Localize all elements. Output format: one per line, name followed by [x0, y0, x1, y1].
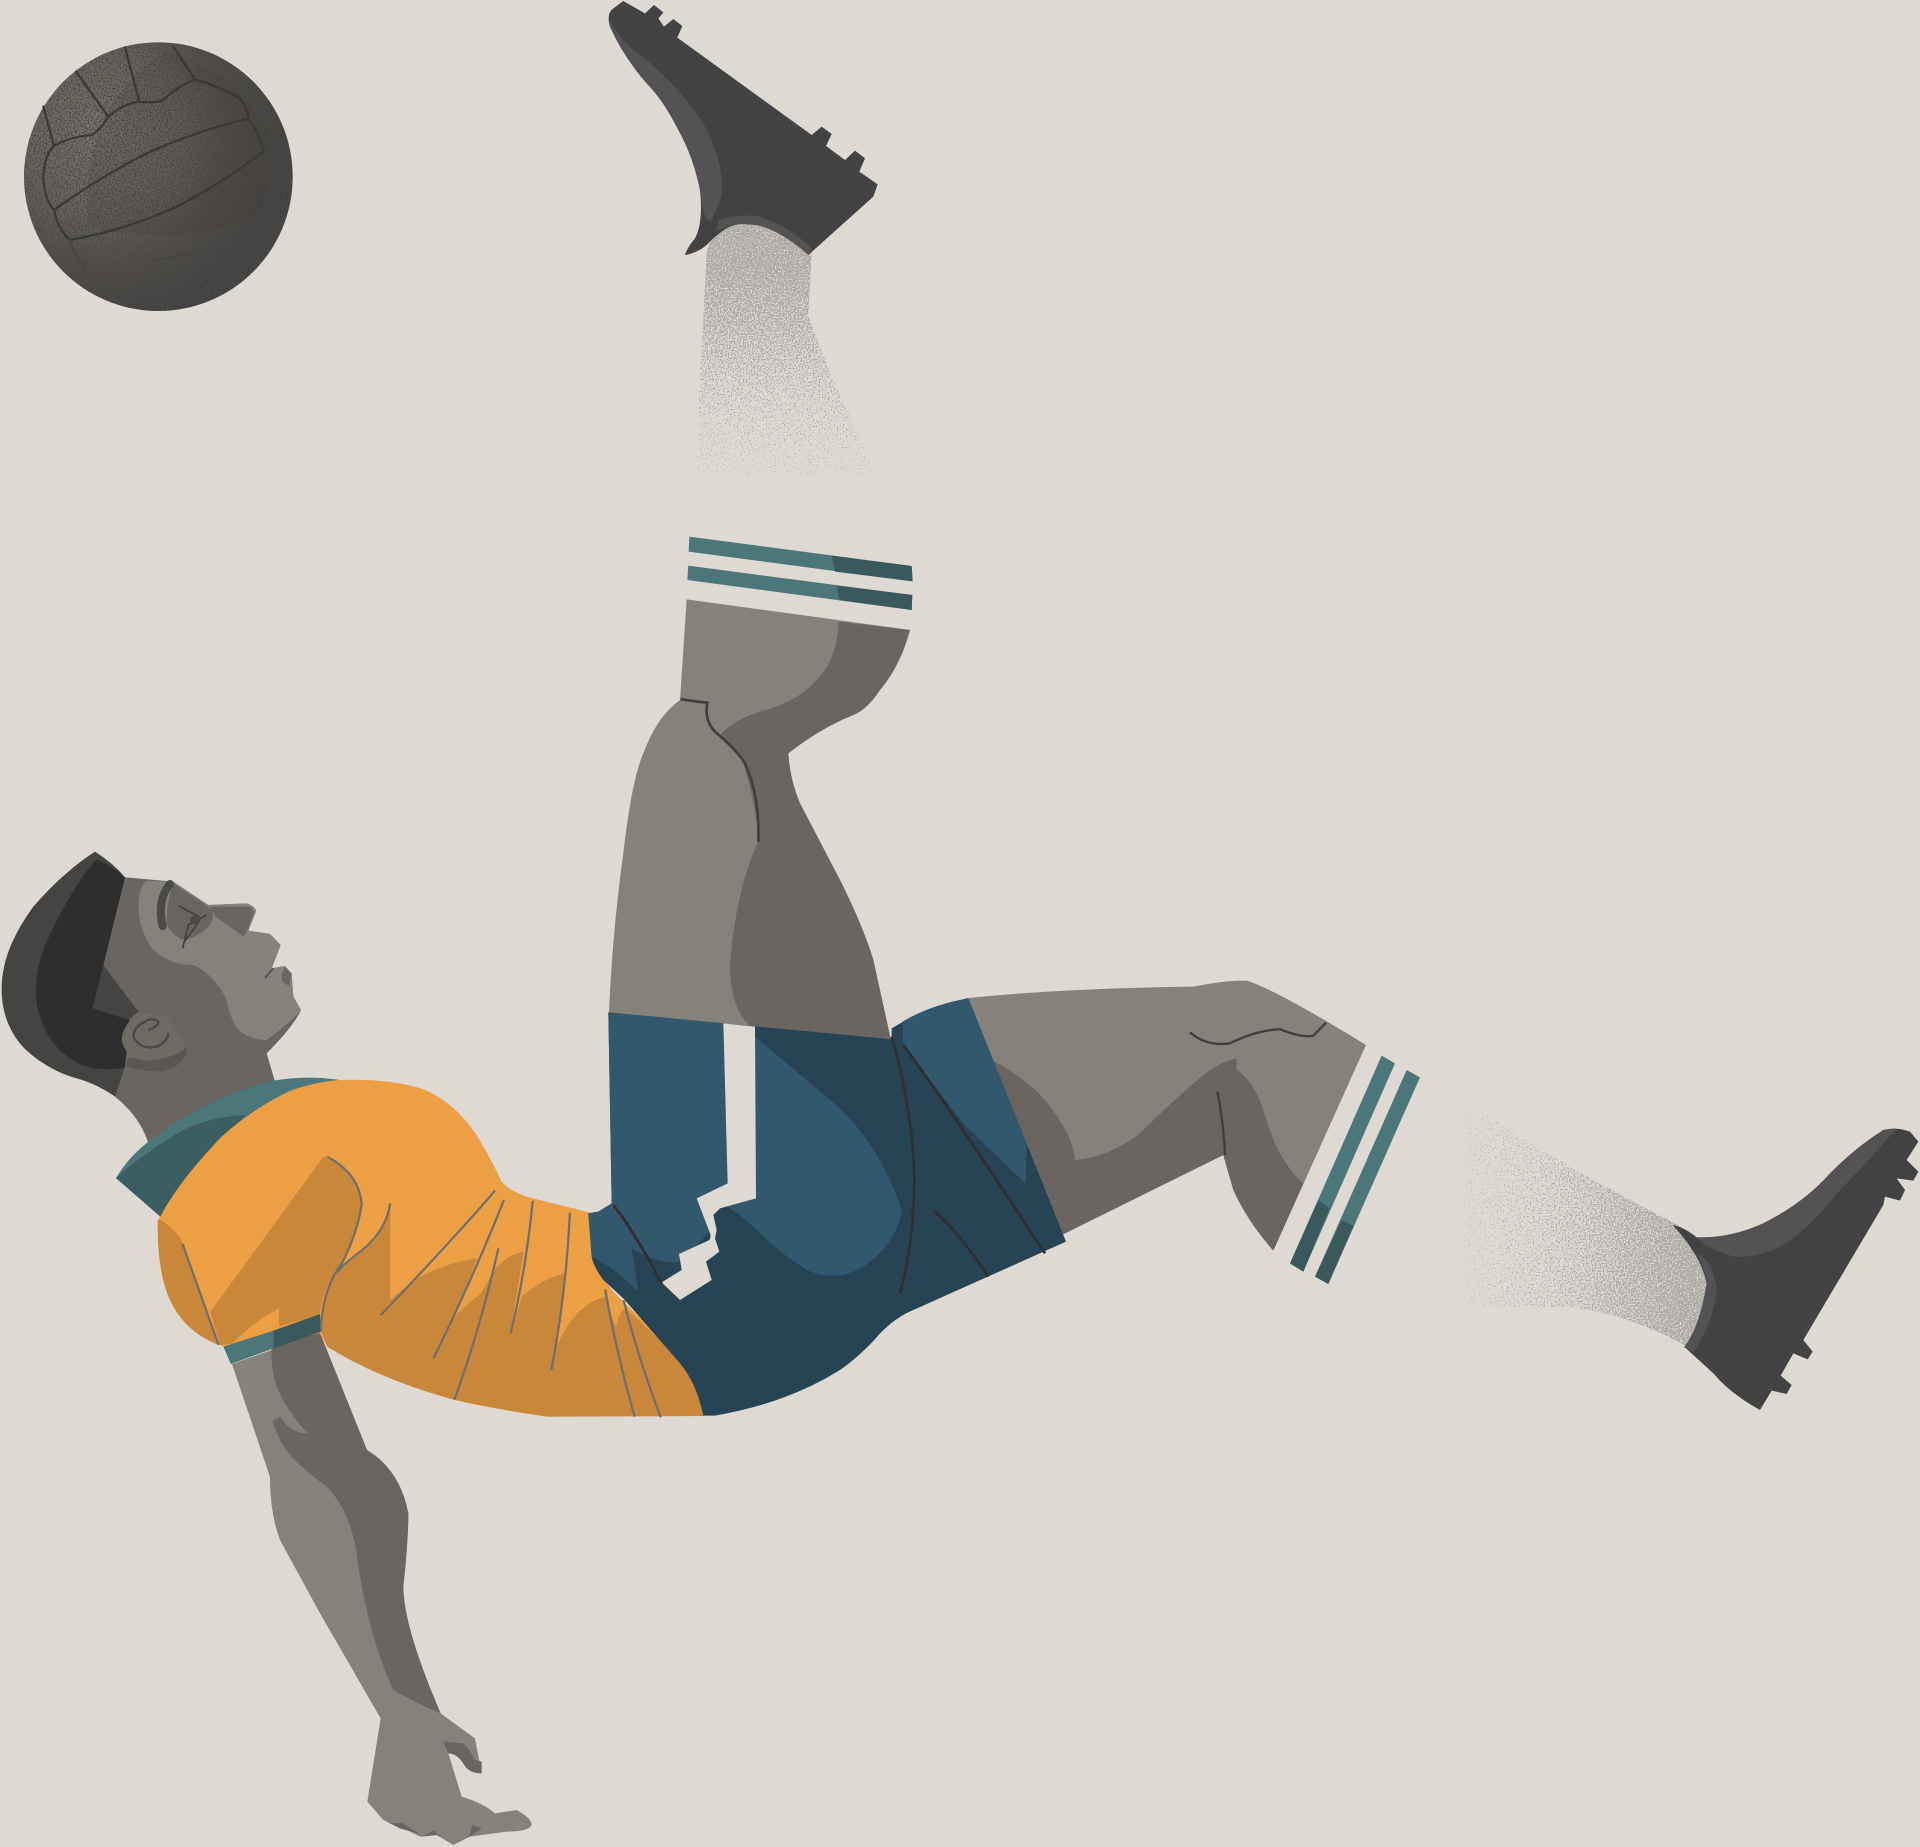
ear	[122, 1012, 187, 1072]
face highlight	[138, 881, 301, 1040]
shirt wrinkles	[183, 1157, 661, 1417]
shorts highlights	[588, 998, 1027, 1292]
face details	[161, 883, 291, 985]
shorts	[588, 998, 1066, 1416]
upper boot	[609, 1, 878, 255]
football	[24, 42, 293, 311]
shorts seams	[613, 1037, 1045, 1293]
hair	[2, 852, 138, 1097]
white side stripe	[662, 1023, 756, 1300]
shorts base	[588, 998, 1066, 1416]
skin shadow	[97, 877, 301, 1143]
shirt	[116, 1078, 704, 1417]
upper leg: sock bands and shin	[608, 537, 913, 1043]
arm and hand	[232, 1333, 532, 1845]
lower leg: thigh and sock bands	[965, 981, 1420, 1284]
head and neck	[2, 852, 301, 1143]
upper sock fading out	[695, 221, 880, 483]
lower boot	[1673, 1128, 1918, 1410]
collar	[116, 1078, 340, 1217]
shirt body	[158, 1080, 704, 1417]
lower sock fading out	[1443, 1113, 1713, 1348]
shirt shading	[158, 1157, 704, 1417]
sleeve cuff	[223, 1314, 322, 1364]
